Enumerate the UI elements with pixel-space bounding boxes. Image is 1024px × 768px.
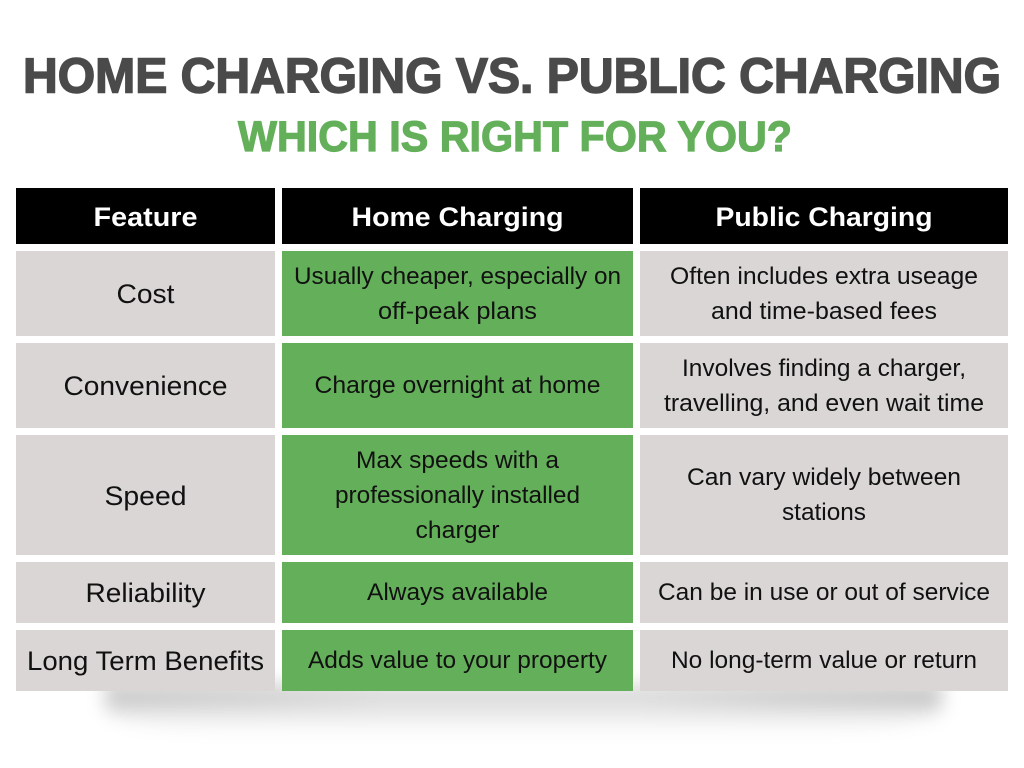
row: Cost public: and time-based fees: [711, 298, 937, 325]
row: Convenience home: [282, 343, 633, 428]
row: Reliability feature: [16, 562, 275, 623]
row: Convenience public: travelling, and even wait time: [664, 390, 984, 417]
row: Reliability public: Can be in use or out of service: [658, 579, 990, 606]
row: Speed home: professionally installed: [335, 482, 580, 509]
row: Speed public: [640, 435, 1008, 555]
row: Long Term Benefits feature: Long Term Benefits: [27, 646, 264, 676]
row: Speed home: [282, 435, 633, 555]
row: Reliability feature: Reliability: [86, 578, 206, 608]
comparison table: [16, 188, 1008, 691]
row: Speed public: stations: [782, 499, 866, 526]
row: Convenience public: [640, 343, 1008, 428]
row: Convenience public: Involves finding a charger,: [682, 355, 966, 382]
row: Reliability home: Always available: [367, 579, 548, 606]
row: Cost public: Often includes extra useage: [670, 263, 978, 290]
row: Reliability home: [282, 562, 633, 623]
row: Convenience home: Charge overnight at home: [314, 372, 600, 399]
row: Long Term Benefits public: No long-term value or return: [671, 647, 977, 674]
row: Cost feature: [16, 251, 275, 336]
row: Speed home: charger: [416, 517, 500, 544]
row: Long Term Benefits feature: [16, 630, 275, 691]
row: Cost public: [640, 251, 1008, 336]
header: Public Charging: Public Charging: [716, 202, 932, 232]
row: Cost home: off-peak plans: [378, 298, 537, 325]
row: Speed home: Max speeds with a: [356, 447, 560, 474]
row: Speed feature: Speed: [104, 481, 186, 511]
row: Long Term Benefits public: [640, 630, 1008, 691]
header: Feature: [16, 188, 275, 244]
header: Feature: Feature: [94, 202, 198, 232]
row: Cost home: [282, 251, 633, 336]
drop shadow under table: [105, 684, 942, 734]
row: Cost home: Usually cheaper, especially on: [294, 263, 621, 290]
subtitle: WHICH IS RIGHT FOR YOU?: [238, 113, 792, 161]
row: Convenience feature: [16, 343, 275, 428]
header: Public Charging: [640, 188, 1008, 244]
row: Reliability public: [640, 562, 1008, 623]
header: Home Charging: [282, 188, 633, 244]
row: Speed public: Can vary widely between: [687, 464, 961, 491]
title: HOME CHARGING VS. PUBLIC CHARGING: [23, 50, 1001, 104]
header: Home Charging: Home Charging: [352, 202, 564, 232]
row: Convenience feature: Convenience: [64, 371, 228, 401]
row: Long Term Benefits home: Adds value to your property: [308, 647, 607, 674]
row: Long Term Benefits home: [282, 630, 633, 691]
row: Speed feature: [16, 435, 275, 555]
row: Cost feature: Cost: [116, 279, 175, 309]
